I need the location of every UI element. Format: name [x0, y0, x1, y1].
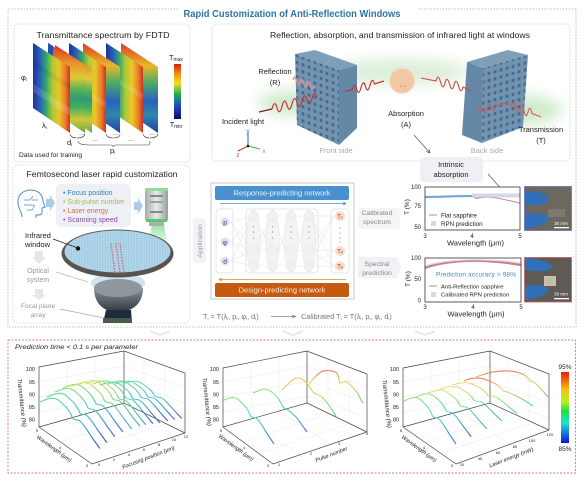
green glow [258, 59, 562, 125]
chart: anti-reflection sapphire transmittance: Calibrated RPN prediction [441, 292, 509, 298]
chart: laser energy [380, 351, 554, 469]
chart: laser energy: 40 [478, 456, 483, 461]
colorbar: 85 to 95 percent: 85% [558, 446, 572, 453]
chart: focusing position: 12 [184, 434, 189, 439]
formula: calibration relation: , p [361, 312, 369, 321]
output layer: Tθ [337, 264, 343, 270]
colorbar: Tmax to Tmin: max [173, 57, 183, 63]
colorbar: 85 to 95 percent: 95% [558, 364, 572, 371]
chart: laser energy: 80 [393, 418, 399, 424]
formula: calibration relation: , φ [237, 312, 246, 321]
title: Rapid Customization of Anti-Reflection Windows [184, 8, 401, 20]
flow: optical system and focal plane array: Optical [27, 268, 49, 275]
chart: pulse number: 80 [213, 418, 219, 424]
formula: calibration relation: ) [389, 312, 392, 321]
arrow: reflected wave [293, 77, 314, 89]
chart: anti-reflection sapphire transmittance: 100 [411, 256, 422, 262]
axis labels: ··· [128, 138, 134, 144]
label: transmission: (T) [536, 136, 546, 145]
bar: design-predicting network: Design-predicting network [239, 286, 326, 294]
formula: calibration relation: Calibrated T [301, 312, 341, 321]
chart: pulse number: 4 [366, 431, 369, 436]
arrow: wave before back side [421, 77, 471, 91]
formula: calibration relation: i [388, 316, 389, 321]
chart: pulse number: 100 [210, 367, 219, 373]
arrow: wave after front side [345, 80, 384, 92]
chart: focusing position: 0 [98, 462, 101, 467]
chart: anti-reflection sapphire transmittance [405, 256, 523, 318]
input layer: p [223, 220, 227, 226]
label: reflection [258, 67, 292, 87]
chart: flat sapphire transmittance: 5 [518, 234, 522, 240]
chart: flat sapphire transmittance: 75 [414, 204, 422, 210]
chart: flat sapphire transmittance: 4 [470, 234, 474, 240]
frame: upper section dashed border [8, 9, 576, 327]
photo: anti-reflection sample: 30 mm [554, 292, 568, 296]
label: incident light: Incident light [222, 117, 265, 126]
chart: pulse number: 85 [213, 405, 219, 411]
formula: calibration relation: ) [256, 312, 259, 321]
chart: focusing position: 95 [29, 380, 35, 386]
chart: focusing position: 2 [113, 457, 116, 462]
chart: focusing position: 4 [128, 452, 131, 457]
chart: laser energy: 120 [547, 432, 554, 437]
arrow: head to parameters [46, 195, 55, 211]
chart: laser energy: 100 [529, 438, 536, 443]
chart: laser energy: 20 [460, 462, 465, 467]
formula: calibration relation: , p [228, 312, 236, 321]
chart: focusing position: 85 [29, 405, 35, 411]
arrow: intrinsic absorption to chart [488, 174, 504, 192]
chart: pulse number: 90 [213, 392, 219, 398]
hidden layers [246, 209, 318, 273]
network connections [231, 216, 334, 266]
parameter list [56, 184, 131, 227]
chart: focusing position: 80 [29, 418, 35, 424]
chart: pulse number: 1 [278, 462, 281, 467]
chart: laser energy: 100 [390, 367, 399, 373]
chart: anti-reflection sapphire transmittance: Prediction accuracy > 98% [436, 272, 516, 278]
flow: optical system and focal plane array: system [27, 277, 49, 284]
callout: intrinsic absorption [420, 157, 483, 182]
label: spectral prediction [358, 257, 401, 278]
chart: anti-reflection sapphire transmittance: 0 [418, 298, 422, 304]
icon: absorption sphere: ··· [400, 83, 406, 90]
icon: xyz axes: x [262, 148, 266, 155]
icon: xyz axes: y [246, 128, 250, 135]
label: spectral prediction: prediction [362, 270, 392, 277]
arrow: forward direction [220, 202, 346, 205]
icon: front-side window block [295, 50, 357, 145]
chart: anti-reflection sapphire transmittance: Anti-Reflection sapphire [441, 284, 504, 290]
chart: flat sapphire transmittance [404, 185, 522, 248]
chart: flat sapphire transmittance: 50 [414, 225, 422, 231]
parameter list: • Laser energy [63, 208, 109, 215]
label: front side: Front side [319, 146, 353, 155]
chart: laser energy: Laser energy (mW) [489, 447, 535, 469]
chart: laser energy: 3 [451, 463, 454, 468]
parameter list: • Scanning speed [63, 217, 118, 224]
chart: focusing position: 8 [158, 442, 161, 447]
icon: absorption sphere [390, 68, 414, 94]
axis labels: φ [21, 73, 26, 82]
chart: flat sapphire transmittance: Flat sapphire [441, 212, 477, 220]
chart: flat sapphire transmittance: RPN prediction [441, 221, 483, 228]
heading: reflection absorption transmission: Reflection, absorption, and transmission of infrared light at windows [270, 31, 530, 40]
heading: transmittance spectrum: Transmittance spectrum by FDTD [36, 30, 170, 40]
label: reflection: Reflection [258, 67, 292, 76]
output layer: Tδ [337, 250, 343, 256]
chart: flat sapphire transmittance: 3 [423, 234, 427, 240]
chart: laser energy: 5 [400, 428, 403, 433]
icon: optical system under the window [91, 273, 145, 323]
chart: pulse number: Wavelength (μm) [217, 433, 254, 463]
chart: pulse number: 3 [267, 463, 270, 468]
axis labels: ··· [112, 132, 118, 138]
formula: calibration relation: i [360, 316, 361, 321]
bar: response-predicting network [215, 186, 349, 200]
chart: focusing position: 10 [172, 437, 177, 442]
label: calibrated spectrum: spectrum [363, 219, 391, 226]
label: transmission [519, 125, 563, 145]
label: transmission: Transmission [519, 125, 563, 134]
arrow: incident wave [259, 93, 317, 112]
label: back side: Back side [471, 146, 503, 155]
chart: anti-reflection sapphire transmittance: T (%) [405, 271, 412, 287]
panel: femtosecond laser rapid customization [13, 165, 190, 323]
chart: pulse number: Transmittance (%) [200, 377, 212, 426]
colorbar: Tmax to Tmin [169, 55, 183, 130]
output layer: Tλ [337, 214, 343, 220]
tag: application [193, 218, 206, 263]
chart: pulse number: Pulse number [315, 446, 350, 464]
axis labels: ··· [92, 138, 98, 144]
chart: laser energy: 4 [423, 445, 426, 450]
chart: laser energy: 95 [393, 380, 399, 386]
axis labels: p [110, 146, 114, 155]
label: infrared window: Infrared [25, 231, 51, 240]
arrow: inverse direction [219, 278, 346, 281]
colorbar: 85 to 95 percent [558, 364, 572, 453]
icon: xyz axes [236, 128, 266, 159]
heading: femtosecond laser: Femtosecond laser rapid customization [26, 169, 178, 179]
icon: AI head [18, 190, 45, 218]
parameter list: • Sub-pulse number [63, 199, 125, 206]
panel: parameter prediction charts [8, 340, 576, 473]
axis labels: i [114, 150, 115, 155]
chart: laser energy: 60 [496, 450, 501, 455]
formula: calibration relation: i [369, 316, 370, 321]
chart: pulse number: 4 [243, 445, 246, 450]
chart: focusing position: Transmittance (%) [15, 378, 27, 427]
label: infrared window [24, 231, 80, 251]
chart: anti-reflection sapphire transmittance: 4 [471, 305, 475, 311]
chart: anti-reflection sapphire transmittance: Wavelength (μm) [448, 310, 505, 318]
chart: flat sapphire transmittance: T (%) [404, 199, 411, 215]
chart: anti-reflection sapphire transmittance: 5 [519, 305, 523, 311]
bar: design-predicting network [215, 283, 349, 297]
icon: infrared window wafer [62, 230, 174, 278]
panel: neural network [211, 183, 354, 299]
axis labels: ··· [79, 132, 85, 138]
icon: back-side window block [462, 50, 528, 143]
caption: data used for training: Data used for training [19, 152, 82, 159]
chart: focusing position: 3 [86, 463, 89, 468]
chart: pulse number [200, 351, 369, 468]
formula: calibration relation: = T(λ [342, 312, 361, 321]
panel: reflection, absorption, transmission [212, 24, 570, 161]
photo: anti-reflection sample [524, 258, 572, 302]
label: calibrated spectrum [358, 208, 400, 229]
chart: pulse number: 95 [213, 380, 219, 386]
tag: application: Application [197, 224, 204, 258]
formula: calibration relation: i [246, 316, 247, 321]
chart: focusing position: 100 [26, 367, 35, 373]
formula: calibration relation [203, 312, 392, 321]
icon: xyz axes: z [236, 152, 240, 159]
formula: calibration relation: i [379, 316, 380, 321]
chart: flat sapphire transmittance: 100 [411, 185, 422, 191]
callout: intrinsic absorption: absorption [433, 170, 469, 179]
colorbar: Tmax to Tmin: min [174, 124, 182, 130]
parameter list: • Focus position [63, 190, 113, 197]
callout: intrinsic absorption: Intrinsic [438, 160, 464, 169]
colorbar: Tmax to Tmin: T [170, 122, 174, 129]
chart: focusing position: 5 [36, 428, 39, 433]
label: absorption [388, 109, 424, 129]
chart: laser energy: Wavelength (μm) [400, 434, 437, 464]
chart: laser energy: Transmittance (%) [380, 379, 392, 428]
chart: focusing position [15, 351, 189, 471]
icon: objective lens with beam [145, 188, 168, 248]
chart: flat sapphire transmittance: Wavelength (μm) [447, 238, 504, 248]
label: spectral prediction: Spectral [365, 261, 390, 268]
output layer [331, 209, 349, 273]
formula: calibration relation: i [236, 316, 237, 321]
axis labels: ··· [149, 132, 155, 138]
formula: calibration relation: T [203, 312, 207, 321]
flow: optical system and focal plane array: array [30, 312, 46, 319]
input layer: φ [223, 240, 227, 246]
axis labels: i [46, 125, 47, 130]
chart: laser energy: 85 [393, 405, 399, 411]
chart: focusing position: 6 [143, 447, 146, 452]
caption: prediction time: Prediction time < 0.1 s per parameter [15, 344, 139, 351]
bar: response-predicting network: Response-predicting network [233, 188, 331, 198]
label: infrared window: window [24, 240, 51, 249]
axis labels [21, 73, 158, 155]
formula: calibration relation: i [341, 316, 342, 321]
axis labels: λ [42, 121, 46, 130]
chart: focusing position: Wavelength (μm) [35, 434, 72, 464]
formula: calibration relation: i [255, 316, 256, 321]
label: absorption: Absorption [388, 109, 424, 118]
label: reflection: (R) [270, 78, 281, 87]
input layer: d [223, 258, 227, 266]
chart: anti-reflection sapphire transmittance: 3 [423, 305, 427, 311]
arrow: parameters to objective [134, 198, 143, 214]
axis labels: d [67, 138, 71, 147]
chart: pulse number: 5 [220, 428, 223, 433]
formula: calibration relation: , d [247, 312, 255, 321]
photo: flat sapphire sample [524, 186, 572, 230]
flow: optical system and focal plane array [21, 251, 104, 319]
chart: laser energy: 80 [513, 444, 518, 449]
formula: calibration relation: i [227, 316, 228, 321]
flow: optical system and focal plane array: Focal plane [21, 303, 55, 310]
arrows: section connectors [150, 331, 435, 335]
panel: transmittance spectrum by FDTD [14, 24, 190, 162]
arrow: transmitted wave [478, 102, 541, 117]
formula: calibration relation: = T(λ [208, 312, 228, 321]
label: absorption: (A) [401, 120, 412, 129]
chart: focusing position: 90 [29, 392, 35, 398]
formula: calibration relation: , φ [370, 312, 380, 321]
chart: focusing position: 4 [59, 445, 62, 450]
chart: pulse number: 3 [338, 441, 341, 446]
colorbar: Tmax to Tmin: T [169, 55, 173, 62]
arrow: absorption to intrinsic absorption [414, 135, 430, 153]
chart: laser energy: 90 [393, 392, 399, 398]
input layer [216, 209, 233, 273]
formula: calibration relation: i [207, 316, 208, 321]
chart: stacked spectrum sheets [33, 43, 158, 133]
label: calibrated spectrum: Calibrated [362, 210, 393, 217]
chart: pulse number: 2 [310, 451, 313, 456]
formula: calibration relation: , d [380, 312, 388, 321]
axis labels: i [26, 77, 27, 82]
axis labels: i [71, 142, 72, 147]
chart: focusing position: Focusing position (μm) [122, 445, 176, 471]
photo: flat sapphire sample: 30 mm [554, 221, 568, 226]
chart: anti-reflection sapphire transmittance: 50 [414, 277, 422, 283]
